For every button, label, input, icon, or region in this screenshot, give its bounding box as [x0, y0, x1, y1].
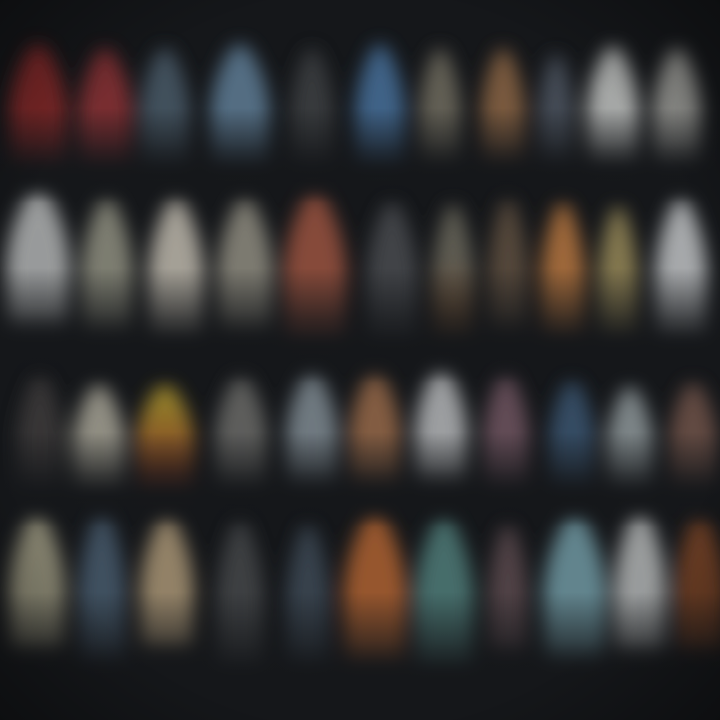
bottle: yellow to red [135, 384, 195, 490]
bottle: pale slate [607, 387, 653, 486]
bottle: white [6, 188, 70, 326]
bottle: silver [614, 510, 666, 652]
bottle: pale grey [653, 48, 701, 162]
bottle: rust [674, 516, 720, 652]
bottle: plum [488, 524, 528, 652]
bottle: blue [355, 44, 405, 164]
bottle: white [587, 46, 639, 162]
bottle: teal [414, 516, 474, 664]
bottle: sage [81, 198, 133, 330]
bottle: cream [148, 198, 204, 334]
bottle: light slate [286, 372, 338, 484]
bottle: blue grey [286, 524, 330, 662]
bottle: grey blue [538, 54, 574, 162]
bottle: ivory [73, 384, 125, 488]
bottle: khaki [419, 48, 461, 162]
bottles: row 3 [17, 368, 717, 490]
bottles: row 4 [9, 510, 720, 664]
bottle: slate blue [78, 512, 126, 660]
bottle: steel blue [210, 44, 270, 164]
bottle: dark grey [17, 374, 63, 488]
bottles: row 1 [9, 44, 701, 164]
bottle: navy [549, 380, 595, 486]
bottle: terracotta [283, 192, 347, 338]
bottle: bright white [655, 198, 707, 334]
bottle: sand [140, 516, 194, 648]
bottle: brown [488, 198, 528, 330]
bottle: orange [541, 202, 585, 334]
bottle: umber [669, 382, 717, 486]
bottle: slate [140, 48, 190, 164]
bottle: mauve [483, 374, 529, 486]
bottle: mid grey [215, 376, 267, 486]
bottle: orange [343, 512, 407, 660]
bottle: taupe amber [432, 204, 474, 336]
bottle: charcoal [216, 520, 264, 664]
bottle: copper [481, 48, 525, 162]
bottle: graphite [366, 202, 418, 338]
bottles: row 2 [6, 188, 707, 338]
bottle: aqua [543, 514, 607, 658]
bottle: red [9, 44, 67, 164]
bottle: dark red [78, 48, 132, 164]
bottle: charcoal [290, 48, 334, 164]
bottle: tan [349, 372, 401, 484]
bottle: olive cream [9, 512, 65, 650]
bottle: stone [217, 198, 273, 330]
bottle: mustard [598, 206, 638, 334]
bottle: silver [415, 368, 467, 482]
